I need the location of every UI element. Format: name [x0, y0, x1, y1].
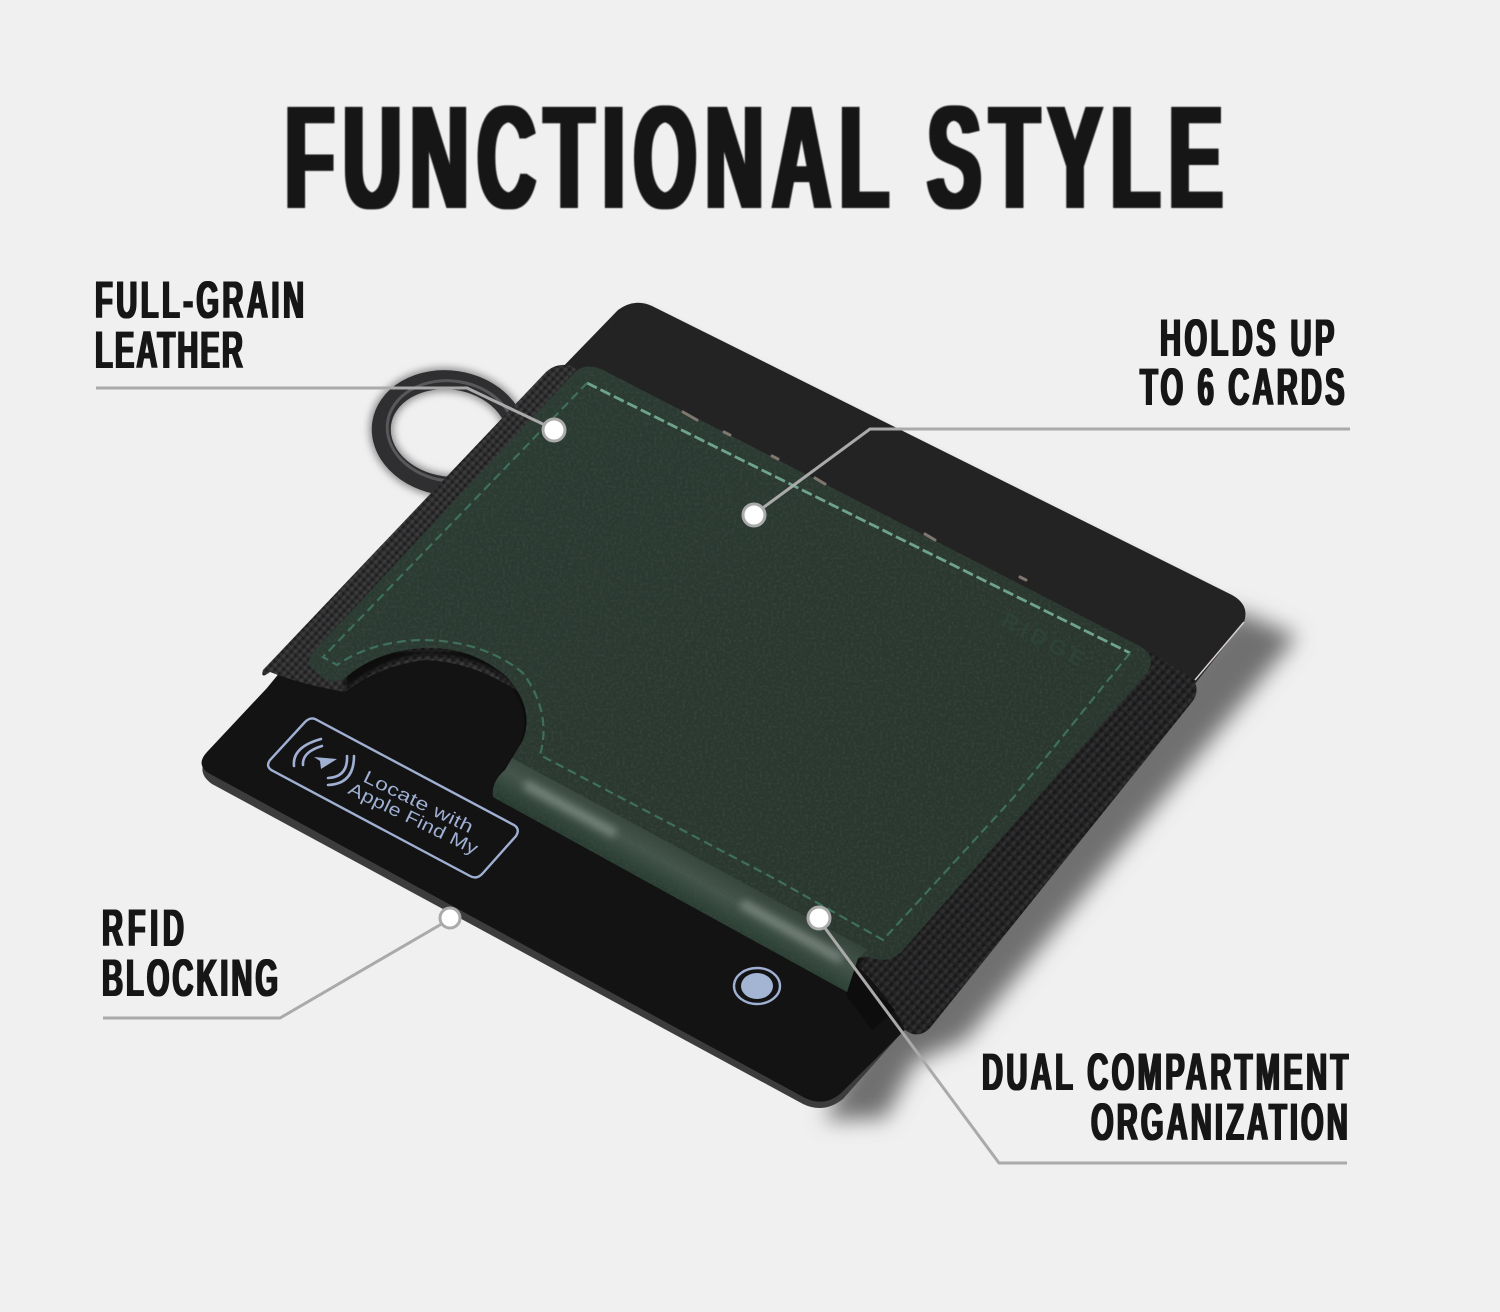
callout: holds up to 6 cards: TO 6 CARDS	[1140, 358, 1345, 417]
badge text: Apple Find My	[345, 779, 482, 859]
card edge teeth	[683, 412, 1026, 580]
shadow under leather notch	[345, 650, 560, 800]
find my badge	[268, 718, 518, 877]
callout: dual compartment organization: DUAL COMPARTMENT	[982, 1043, 1348, 1102]
callout: dual compartment organization: ORGANIZATION	[1091, 1093, 1348, 1152]
top stitching	[587, 383, 1130, 653]
side and lower stitching	[323, 383, 1130, 940]
callout: full-grain leather	[95, 271, 565, 441]
callout: rfid blocking: RFID	[102, 899, 184, 958]
badge text	[345, 767, 482, 859]
drop shadow	[600, 306, 1297, 1120]
left elastic band	[262, 365, 600, 700]
callout: rfid blocking: BLOCKING	[102, 949, 278, 1008]
title: FUNCTIONAL STYLE	[285, 77, 1223, 240]
leather fold highlight	[493, 758, 868, 992]
power button icon	[734, 968, 780, 1004]
green leather panel	[309, 366, 1151, 992]
icon: location waves	[294, 739, 354, 785]
callout: holds up to 6 cards	[743, 309, 1350, 526]
back card	[555, 303, 1246, 700]
callout: full-grain leather: LEATHER	[95, 321, 243, 380]
right elastic band	[858, 652, 1197, 1035]
embossed logo: RIDGE	[998, 607, 1089, 672]
callout: holds up to 6 cards: HOLDS UP	[1160, 309, 1334, 368]
leather grain texture	[309, 366, 1151, 992]
fold sheen	[528, 786, 838, 957]
callout: rfid blocking	[102, 899, 460, 1018]
key ring	[374, 371, 524, 495]
callout: full-grain leather: FULL-GRAIN	[95, 271, 304, 330]
callout: dual compartment organization	[808, 907, 1348, 1163]
badge text: Locate with	[360, 767, 477, 837]
card slot under fold	[846, 968, 895, 1030]
lower card	[202, 650, 925, 1108]
wallet product illustration	[202, 303, 1297, 1120]
